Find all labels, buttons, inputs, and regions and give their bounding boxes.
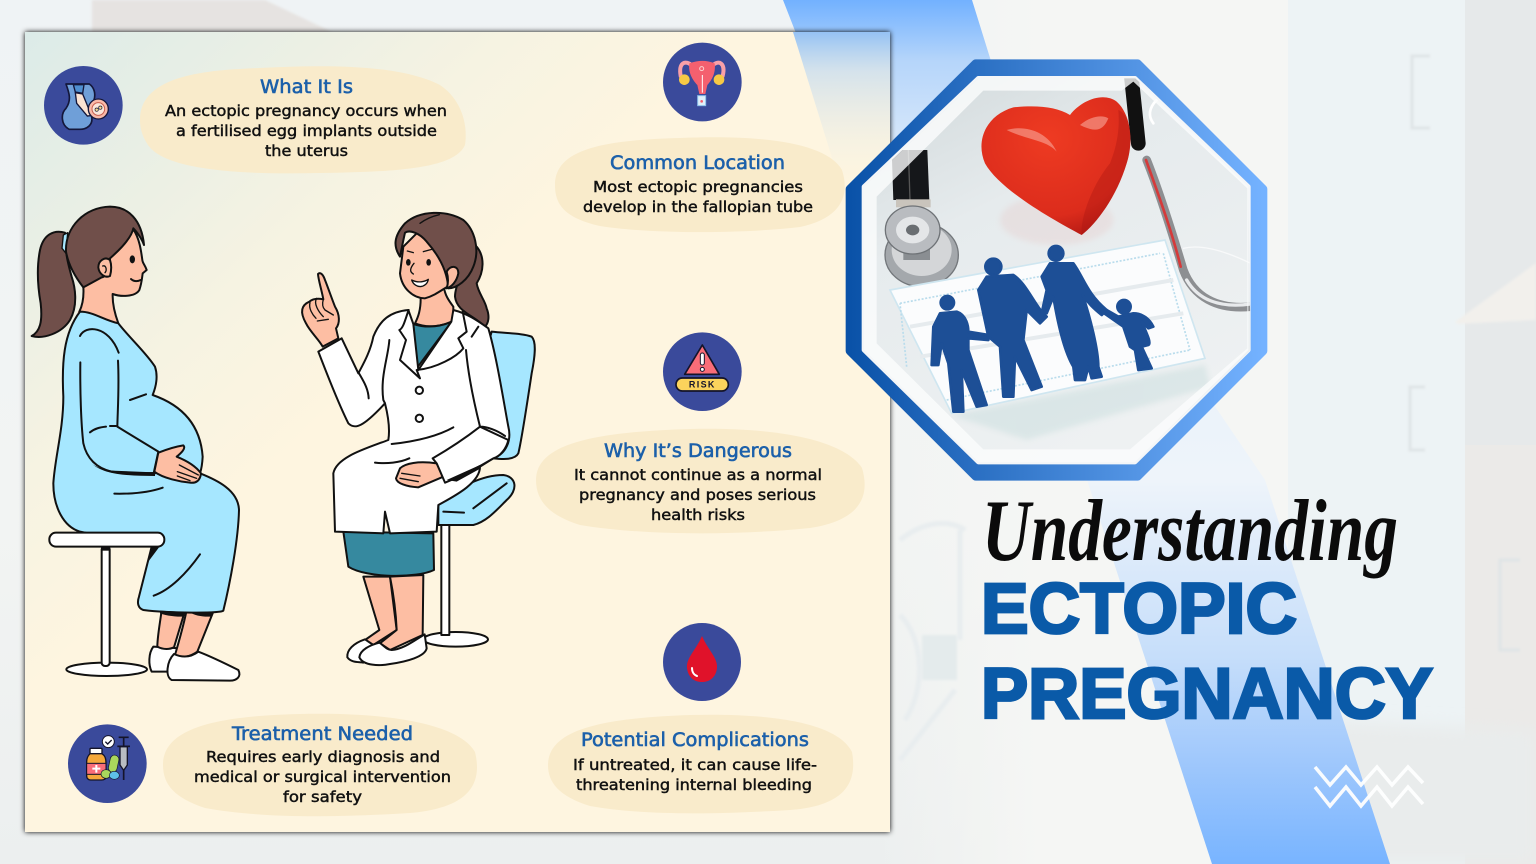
text: Why It's Dangerous description (574, 466, 822, 524)
text: Why It's Dangerous description: pregnancy and poses serious (579, 486, 816, 504)
illustration: doctor seated and pointing (302, 213, 535, 665)
photo frame: octagon with heart and family (850, 63, 1263, 477)
bubble: Treatment Needed (163, 714, 477, 816)
translucent white photo border (864, 78, 1248, 462)
icon: risk warning: RISK (689, 380, 716, 390)
text: Common Location description: Most ectopic pregnancies (593, 178, 803, 196)
title: Understanding Ectopic Pregnancy (981, 483, 1433, 734)
text: What It Is description: a fertilised egg implants outside (176, 122, 437, 140)
decorative blue diagonal band (783, 0, 1390, 864)
text: Treatment Needed description: Requires early diagnosis and (206, 748, 440, 766)
title line: PREGNANCY: PREGNANCY (981, 655, 1433, 734)
heading: Treatment Needed: Treatment Needed (231, 724, 413, 745)
mask shadow reflection (952, 365, 1210, 440)
red heart (981, 97, 1130, 235)
text: Why It's Dangerous description: It cannot continue as a normal (574, 466, 822, 484)
heading: What It Is: What It Is (260, 77, 353, 98)
icon: uterus (663, 43, 742, 121)
surgical mask (890, 240, 1205, 413)
icon: medication and syringe (68, 724, 147, 803)
text: What It Is description (165, 102, 447, 160)
text: Potential Complications description: threatening internal bleeding (576, 776, 812, 794)
title script line: Understanding (982, 483, 1398, 580)
icon: risk warning (663, 332, 742, 411)
heading: Potential Complications: Potential Complications (581, 730, 809, 751)
text: Treatment Needed description: for safety (283, 788, 362, 806)
stethoscope tube and earpiece (1131, 70, 1251, 307)
photo: stethoscope, heart, mask and family (876, 78, 1250, 444)
title line: ECTOPIC: ECTOPIC (981, 570, 1297, 649)
icon: ultrasound of pregnant belly (44, 66, 123, 145)
bubble: What It Is (140, 66, 466, 173)
text: Common Location description: develop in the fallopian tube (583, 198, 813, 216)
bubble: Why It's Dangerous (536, 429, 865, 533)
illustration: pregnant woman seated on stool (32, 207, 239, 681)
paper family silhouettes (932, 246, 1153, 412)
bubble: Potential Complications (548, 715, 853, 813)
text: Potential Complications description: If untreated, it can cause life- (573, 756, 817, 774)
decoration: white zigzag lines (1315, 767, 1423, 806)
text: Treatment Needed description (194, 748, 451, 806)
text: What It Is description: An ectopic pregnancy occurs when (165, 102, 447, 120)
text: Why It's Dangerous description: health risks (651, 506, 745, 524)
heading: Why It's Dangerous: Why It’s Dangerous (604, 441, 792, 462)
icon: blood drop (663, 623, 741, 701)
text: Common Location description (583, 178, 813, 216)
text: Treatment Needed description: medical or surgical intervention (194, 768, 451, 786)
text: What It Is description: the uterus (265, 142, 348, 160)
bubble: Common Location (555, 137, 845, 232)
panel: infographic card (25, 32, 890, 832)
stethoscope chest piece (885, 150, 958, 287)
text: Potential Complications description (573, 756, 817, 794)
heading: Common Location: Common Location (610, 153, 785, 174)
